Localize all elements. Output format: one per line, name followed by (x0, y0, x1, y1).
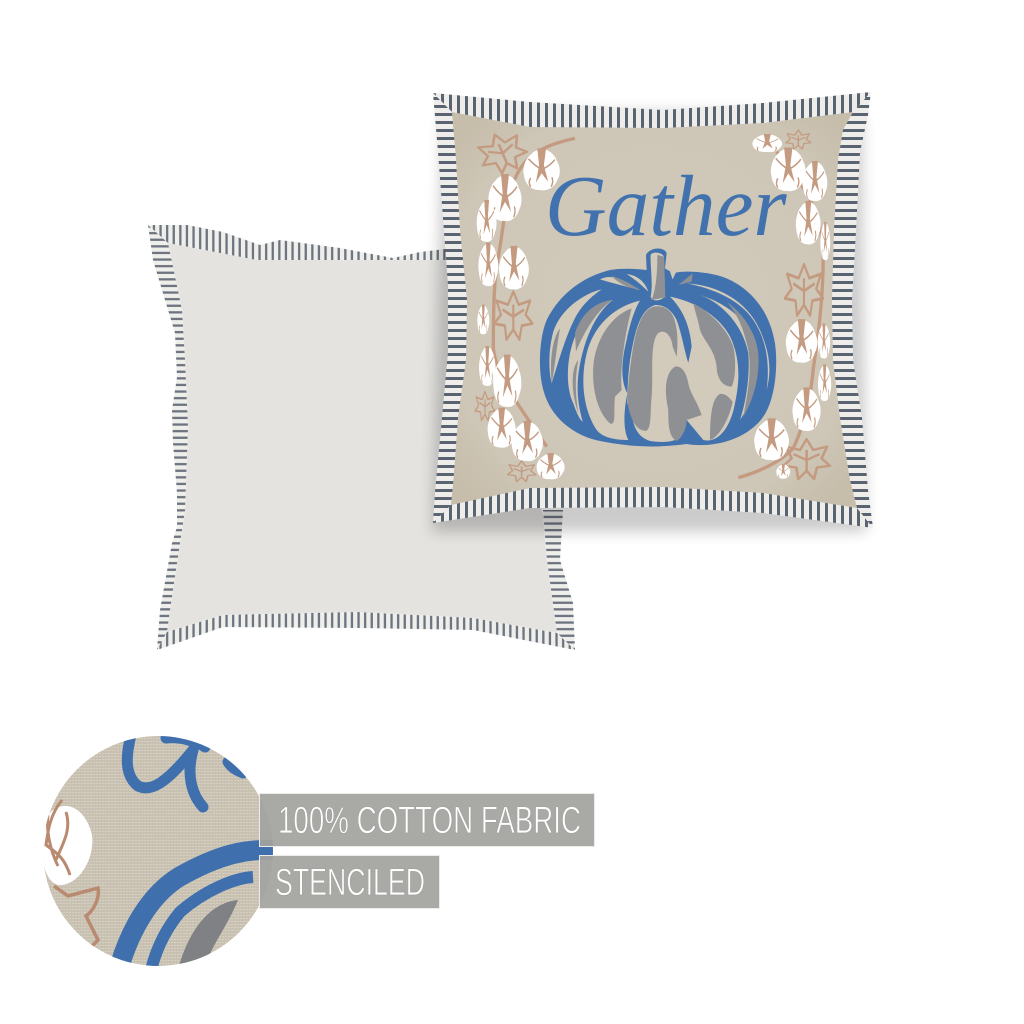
pumpkin grey mottling (551, 255, 759, 441)
fabric detail lens (42, 735, 275, 970)
pumpkin blue silhouette (540, 249, 776, 446)
back pillow body (167, 243, 557, 633)
enlarged cotton boll (42, 806, 92, 885)
enlarged pumpkin inner rib (151, 877, 253, 970)
label: 100% cotton fabric (260, 794, 594, 846)
Gather lettering: Gather (545, 157, 788, 254)
striped flange: top (433, 92, 871, 128)
left leaves (473, 128, 536, 482)
striped flange: left (433, 93, 467, 523)
enlarged Gather lettering (127, 735, 243, 807)
back pillow striped flange: top (148, 225, 470, 260)
striped flange: bottom (433, 487, 873, 528)
back pillow (148, 225, 575, 650)
label background (260, 794, 594, 846)
fabric texture (43, 736, 273, 966)
left stem (493, 138, 575, 447)
front pillow (433, 92, 873, 528)
back pillow striped flange: left (148, 225, 188, 650)
label: stenciled (260, 856, 440, 908)
front pillow body (451, 112, 857, 508)
label background (260, 856, 440, 908)
right leaves (783, 130, 830, 479)
right stem (738, 152, 823, 478)
label text: 100% COTTON FABRIC (278, 800, 581, 842)
front pillow shadow (432, 112, 866, 532)
pumpkin cream segments (549, 253, 769, 442)
left cotton bolls (477, 148, 565, 479)
label text: STENCILED (275, 862, 425, 904)
enlarged pumpkin rib (119, 850, 275, 968)
left cotton garland (473, 128, 575, 482)
enlarged pumpkin grey patch (179, 900, 238, 966)
enlarged boll veins (46, 800, 70, 875)
striped flange: right (832, 92, 873, 528)
back pillow striped flange: bottom (157, 612, 575, 650)
back pillow striped flange: right (543, 510, 575, 650)
enlarged leaf (54, 886, 98, 950)
right cotton bolls (752, 134, 831, 479)
pumpkin illustration (540, 249, 776, 446)
right cotton garland (738, 130, 831, 479)
